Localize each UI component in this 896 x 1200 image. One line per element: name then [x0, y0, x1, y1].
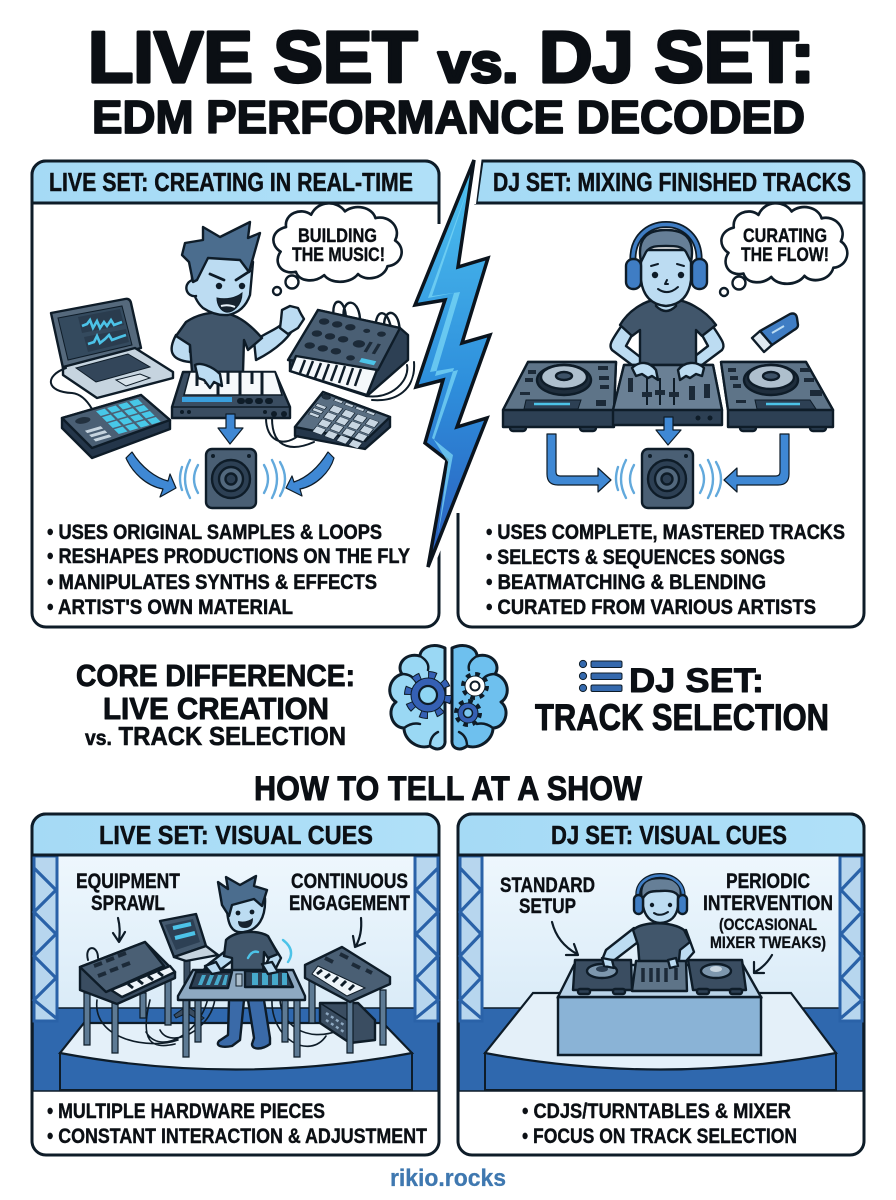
bullet list: [486, 521, 845, 619]
bullet list: • BEATMATCHING & BLENDING: [486, 571, 766, 594]
thought bubble: THE MUSIC!: [292, 245, 385, 266]
panel header: [32, 814, 439, 855]
arrow: sampler to speaker: [286, 452, 334, 496]
icon: rack unit: [320, 1003, 375, 1043]
callout: standard setup: SETUP: [519, 895, 576, 918]
icon: booth decks and mixer: [573, 958, 746, 994]
icon: left synth on table: [80, 942, 175, 1053]
callout: continuous engagement: [289, 870, 410, 947]
panel header: [458, 814, 864, 855]
panel: dj set visual cues: [458, 814, 864, 1155]
stage backdrop: [459, 856, 863, 1091]
panel: live set visual cues: [32, 814, 439, 1155]
panel frame: [32, 814, 439, 1155]
bullet list: • USES ORIGINAL SAMPLES & LOOPS: [47, 521, 382, 544]
bullet list: • FOCUS ON TRACK SELECTION: [522, 1125, 797, 1148]
callout: standard setup: STANDARD: [500, 874, 595, 897]
panel frame: [32, 161, 439, 627]
bullet list: • USES COMPLETE, MASTERED TRACKS: [486, 521, 845, 544]
arrow: right deck to speaker: [724, 434, 789, 492]
arrow: left deck to speaker: [547, 434, 611, 492]
thought bubble: THE FLOW!: [741, 245, 829, 266]
callout: periodic intervention: [703, 870, 833, 973]
icon: list: [579, 660, 622, 692]
icon: speaker: [616, 449, 721, 508]
stage platform: [60, 1023, 412, 1090]
character: live performer small: [202, 876, 291, 1048]
arrow: pad to speaker: [126, 452, 176, 497]
icon: lightning bolt: [415, 160, 490, 567]
icon: laptop: [51, 299, 173, 409]
track selection label: TRACK SELECTION: [535, 697, 829, 738]
bullet list: • CONSTANT INTERACTION & ADJUSTMENT: [47, 1125, 427, 1148]
heading: LIVE SET: CREATING IN REAL-TIME: [49, 167, 413, 197]
callout: standard setup: [500, 874, 595, 955]
panel: dj set: [458, 161, 864, 627]
icon: right synth on table: [305, 947, 390, 1053]
bullet list: • CDJS/TURNTABLES & MIXER: [522, 1100, 791, 1123]
icon: center table with pad controllers: [178, 962, 305, 1057]
stage platform: [485, 993, 836, 1090]
stage backdrop: [33, 856, 438, 1091]
bullet list: • RESHAPES PRODUCTIONS ON THE FLY: [47, 545, 410, 568]
thought bubble: BUILDING: [298, 226, 377, 247]
core difference text: [76, 658, 355, 751]
core difference text: vs. TRACK SELECTION: [85, 721, 346, 751]
panel: live set: [32, 161, 439, 627]
callout: periodic intervention: PERIODIC: [726, 870, 810, 893]
stage floor: [459, 1008, 863, 1091]
callout: periodic intervention: INTERVENTION: [703, 892, 833, 915]
character: dj small: [602, 876, 694, 970]
icon: pad sampler: [266, 362, 414, 449]
icon: mixer: [613, 363, 722, 425]
panel header: [476, 161, 864, 203]
callout: equipment sprawl: SPRAWL: [91, 892, 165, 915]
thought bubble: CURATING: [743, 226, 827, 247]
character: live performer: [172, 222, 304, 376]
dj set label: DJ SET:: [629, 662, 764, 700]
bullet list: [47, 1100, 427, 1148]
icon: drum pad controller: [62, 395, 170, 458]
truss left: [460, 856, 482, 1021]
core difference text: LIVE CREATION: [103, 691, 329, 726]
icon: speaker: [180, 449, 285, 508]
icon: dj booth: [558, 965, 761, 1055]
truss right: [415, 856, 438, 1021]
heading: DJ SET: VISUAL CUES: [551, 820, 787, 850]
core difference text: CORE DIFFERENCE:: [76, 658, 355, 693]
section heading: HOW TO TELL AT A SHOW: [254, 770, 643, 808]
footer credit: rikio.rocks: [390, 1165, 506, 1192]
character: dj: [610, 224, 724, 368]
icon: left cdj: [503, 362, 616, 431]
icon: usb stick: [752, 314, 798, 352]
thought bubble: [273, 203, 402, 295]
panel frame: [458, 161, 864, 627]
bullet list: • CURATED FROM VARIOUS ARTISTS: [486, 596, 816, 619]
icon: laptop on stand: [160, 914, 218, 1021]
title: [88, 18, 815, 143]
panel header: [32, 161, 439, 203]
cables: [97, 998, 340, 1046]
thought bubble: [720, 203, 847, 296]
callout: continuous engagement: CONTINUOUS: [291, 870, 408, 893]
callout: equipment sprawl: [76, 870, 180, 942]
title line 2: EDM PERFORMANCE DECODED: [92, 91, 805, 143]
stage floor: [33, 1008, 438, 1091]
panel frame: [458, 814, 864, 1155]
bullet list: • MULTIPLE HARDWARE PIECES: [47, 1100, 325, 1123]
icon: brain with gears: [390, 646, 507, 749]
bullet list: • ARTIST'S OWN MATERIAL: [47, 596, 293, 619]
icon: MIDI keyboard: [172, 364, 290, 418]
bullet list: [47, 521, 410, 619]
icon: right cdj: [721, 362, 833, 431]
callout: equipment sprawl: EQUIPMENT: [76, 870, 180, 893]
heading: LIVE SET: VISUAL CUES: [99, 820, 373, 850]
truss left: [34, 856, 57, 1021]
callout: periodic intervention: (OCCASIONAL: [719, 915, 817, 934]
arrow: keyboard to speaker: [218, 414, 243, 444]
bullet list: [522, 1100, 797, 1148]
dj set core text: [535, 660, 829, 738]
callout: continuous engagement: ENGAGEMENT: [289, 892, 410, 915]
callout: periodic intervention: MIXER TWEAKS): [710, 933, 826, 952]
bullet list: • SELECTS & SEQUENCES SONGS: [486, 546, 785, 569]
icon: modular synth: [288, 302, 408, 396]
truss right: [840, 856, 862, 1021]
arrow: mixer to speaker: [656, 417, 681, 445]
title line 1: LIVE SET vs. DJ SET:: [88, 18, 815, 98]
bullet list: • MANIPULATES SYNTHS & EFFECTS: [47, 571, 377, 594]
